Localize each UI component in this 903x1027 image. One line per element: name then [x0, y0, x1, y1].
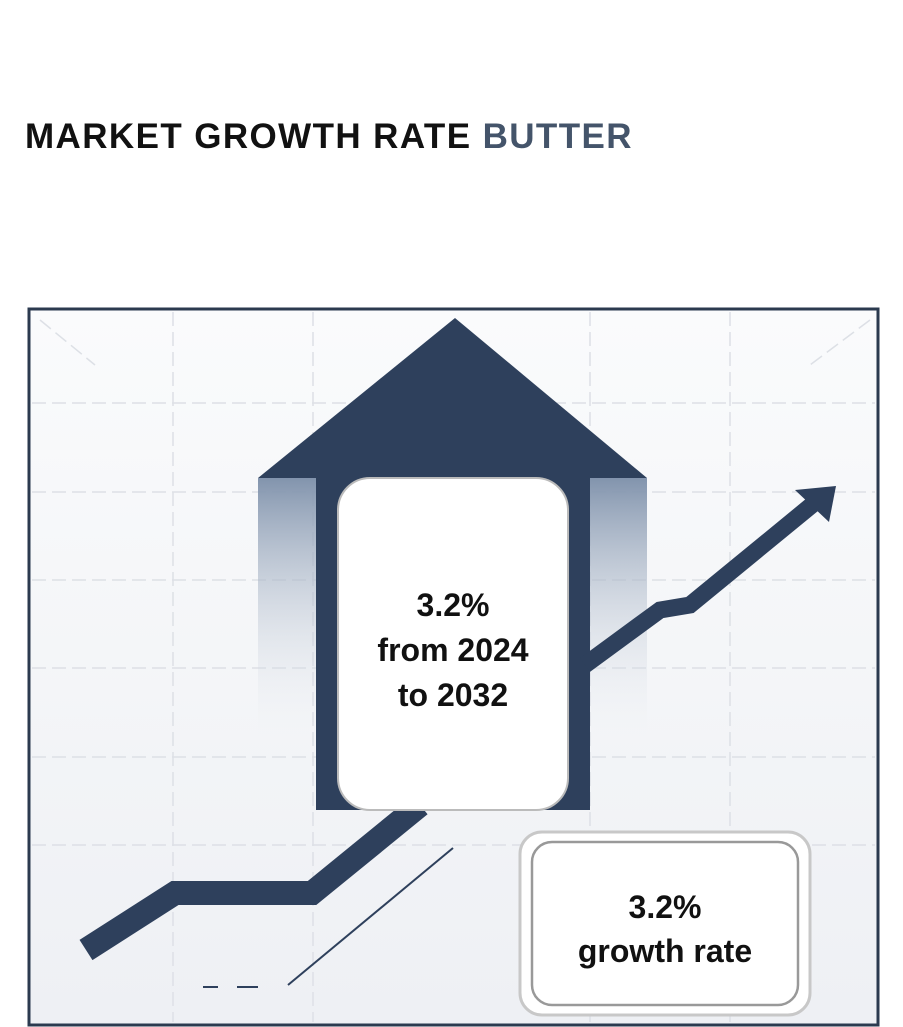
callout: growth rate box: growth rate	[578, 933, 752, 969]
arrow: trend line	[86, 486, 836, 950]
callout: main box: to 2032	[398, 677, 508, 713]
title: MARKET GROWTH RATE BUTTER	[25, 117, 633, 156]
callout: main box	[338, 478, 568, 810]
decorative line	[203, 848, 453, 987]
callout: growth rate box	[520, 832, 810, 1015]
callout: main box: 3.2%	[417, 587, 489, 623]
arrow: up arrow shape	[258, 318, 647, 810]
callout: growth rate box: 3.2%	[629, 889, 701, 925]
callout: main box: from 2024	[377, 632, 529, 668]
